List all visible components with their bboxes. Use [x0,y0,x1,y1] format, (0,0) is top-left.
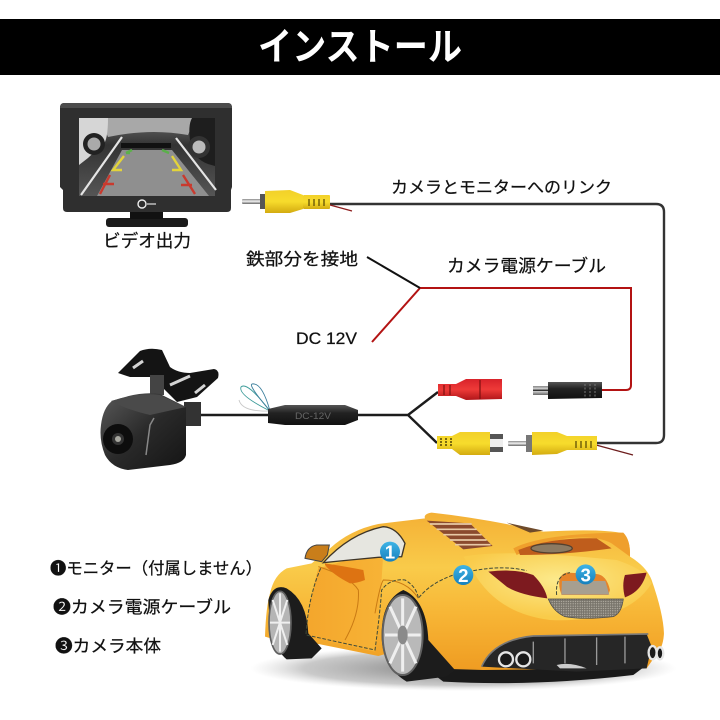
rear diffuser [482,634,652,672]
rear trunk highlight [463,553,652,620]
rear wheel [382,590,455,682]
roof vents [427,521,543,549]
car shadow [250,646,677,691]
icon: spare wire loops [239,384,270,411]
rear mesh grille [548,599,623,618]
badge 2: 2 [458,565,469,586]
spoiler [513,533,630,557]
badge 2 [453,565,473,586]
left tail light [488,571,547,598]
car body [265,513,664,670]
icon: DC-12V inline module: DC-12V [295,411,331,421]
underbody shadow [423,665,647,683]
icon: monitor [60,103,232,227]
label: video output: ビデオ出力 [103,231,191,251]
door panel [305,550,383,652]
icon: black DC plug [533,382,602,399]
side window [323,527,405,563]
title banner: インストール [258,27,462,69]
label: DC 12V: DC 12V [296,329,358,348]
badge 1: 1 [385,542,395,563]
camera bracket [118,349,218,402]
label: ground to iron: 鉄部分を接地 [246,250,358,269]
camera body [100,393,186,470]
front wheel [268,587,322,659]
side mirror [305,545,329,562]
icon: DC-12V inline module [268,405,358,425]
legend item 2: ❷カメラ電源ケーブル [53,597,231,617]
icon: yellow RCA plug (camera side) [508,432,597,455]
camera lens [103,424,133,454]
badge 3: 3 [580,564,591,585]
icon: car diagram [250,513,677,691]
title banner [0,19,720,75]
icon: rear camera [100,349,218,470]
icon: red power socket [438,379,502,400]
monitor logo [138,200,156,208]
right tail light [623,573,647,597]
exhaust pipes [499,646,663,666]
icon: RCA plug (monitor side) [242,190,330,213]
dashed cable route [306,568,570,650]
legend item 3: ❸カメラ本体 [55,637,161,656]
label: link between camera and monitor: カメラとモニターへのリンク [391,178,612,197]
badge 1 [380,542,400,563]
icon: yellow RCA socket [437,432,503,455]
legend item 1: ❶モニター（付属しません） [50,559,262,578]
wheel arch [375,580,418,613]
monitor screen [79,118,216,196]
legend [50,559,262,656]
number plate [559,573,610,595]
badge 3 [576,564,596,585]
label: camera power cable: カメラ電源ケーブル [447,256,606,276]
wiring lines [195,204,664,455]
